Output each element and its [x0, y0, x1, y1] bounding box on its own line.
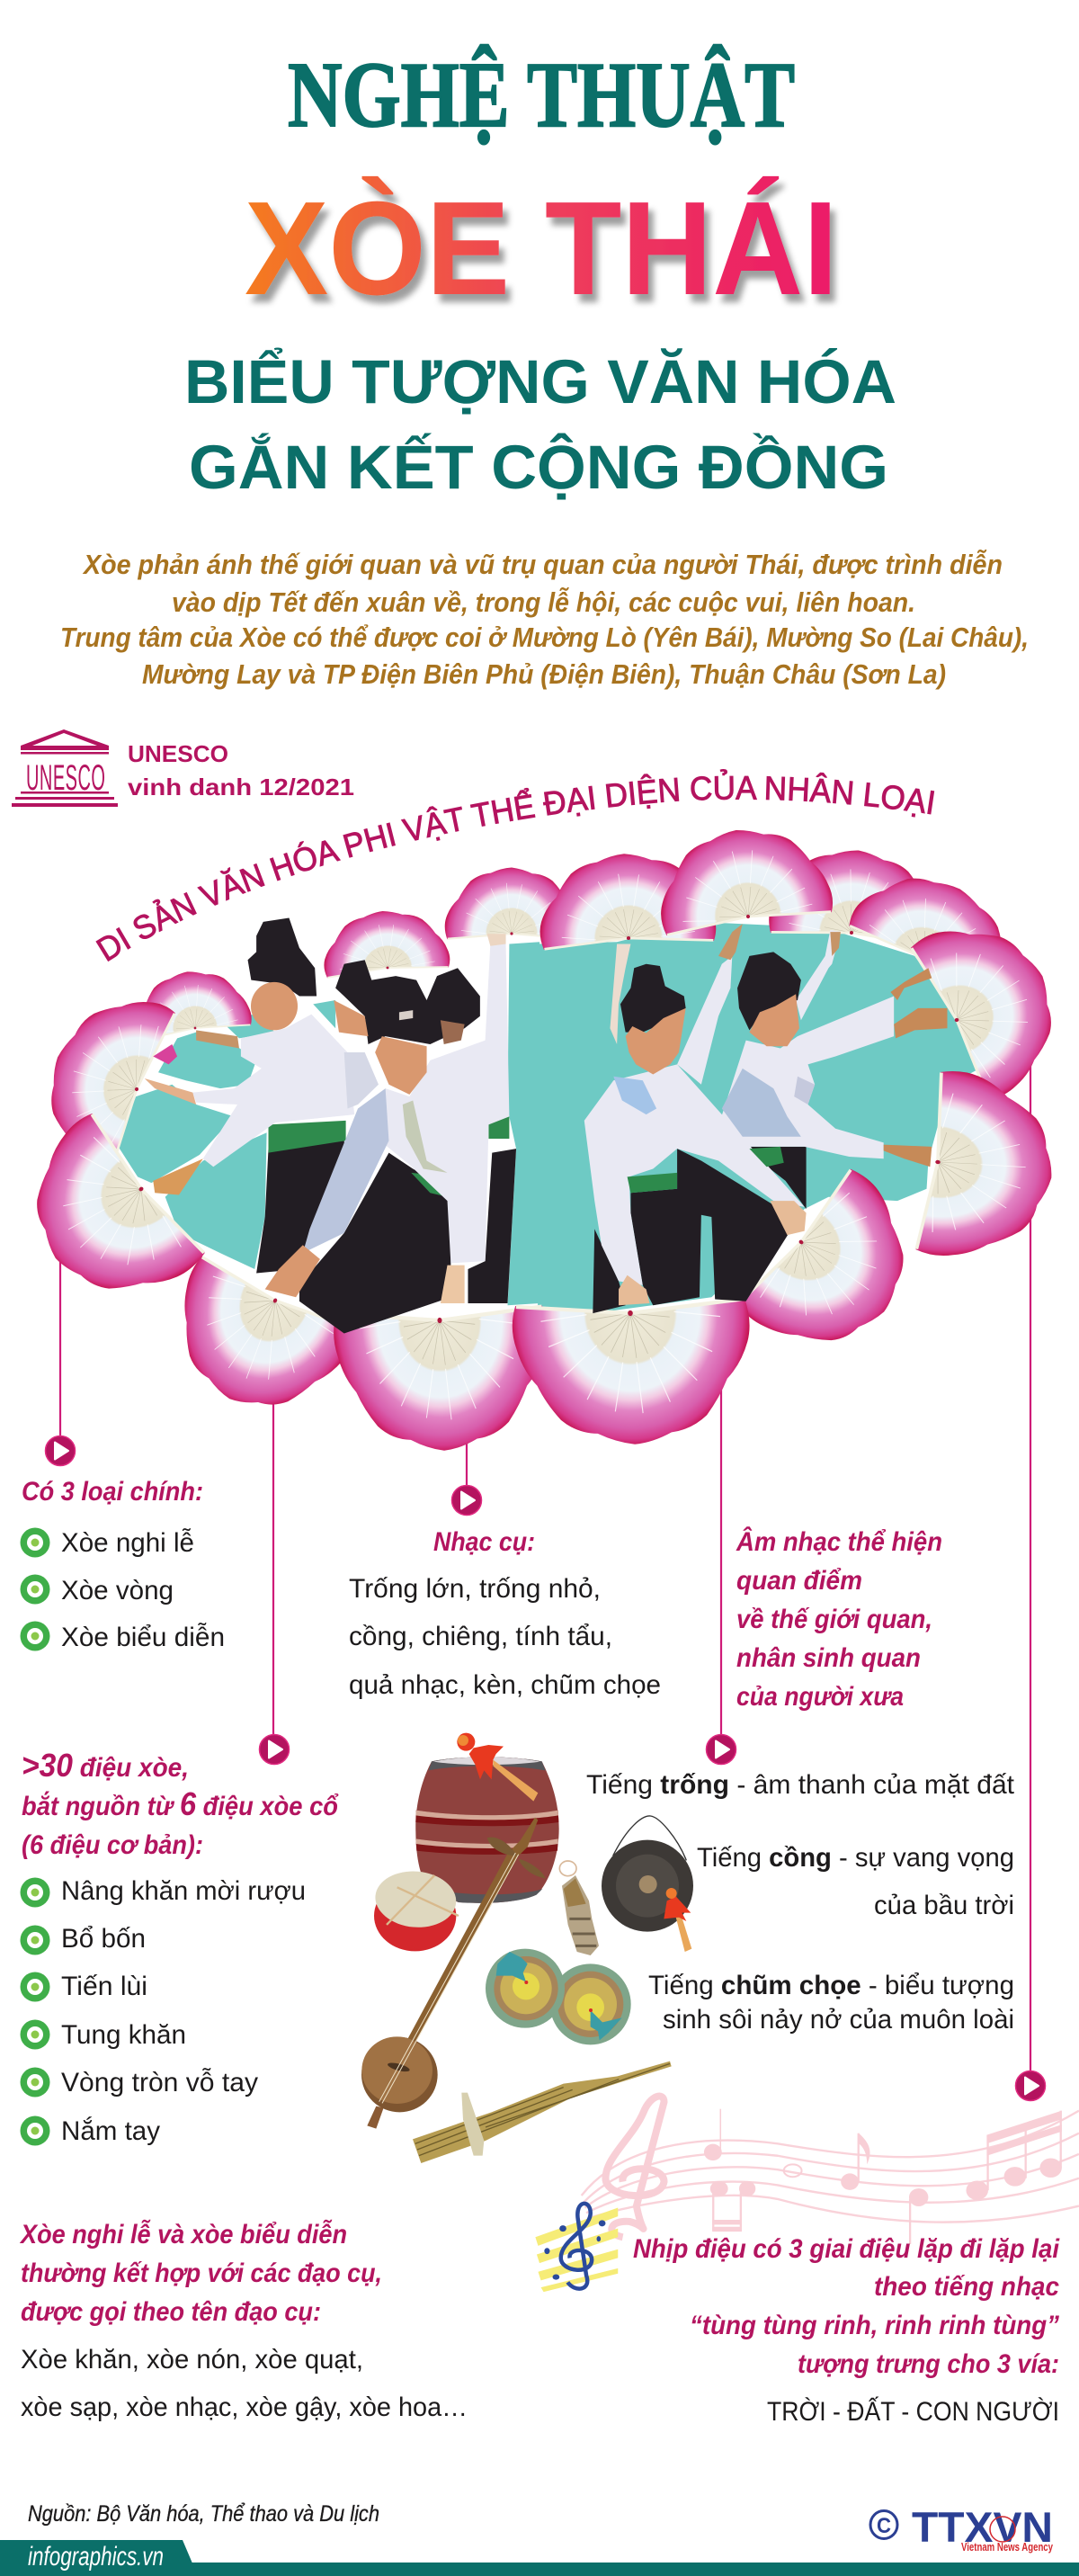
text block: props: thường kết hợp với các đạo cụ,: [21, 2258, 382, 2288]
text block: music worldview: nhân sinh quan: [736, 1643, 921, 1673]
list: three types of Xòe: Xòe biểu diễn: [61, 1623, 225, 1652]
text block: dance count: >30 điệu xòe,: [22, 1747, 189, 1784]
list: three types of Xòe: Xòe nghi lễ: [61, 1528, 194, 1558]
text block: rhythm: [633, 2234, 1060, 2427]
illustration: dancers, left group: [145, 917, 516, 1333]
text block: rhythm: “tùng tùng rinh, rinh rinh tùng”: [690, 2311, 1059, 2340]
text block: music worldview: về thế giới quan,: [736, 1605, 932, 1634]
marker: music meaning: [707, 1734, 736, 1765]
text block: props: xòe sạp, xòe nhạc, xòe gậy, xòe hoa…: [21, 2393, 468, 2422]
text: sounds of instruments: của bầu trời: [874, 1891, 1014, 1920]
icon: cymbals: [486, 1949, 631, 2044]
illustration: ring of fans: [0, 818, 1079, 1454]
list: three types of Xòe: [20, 1527, 225, 1652]
text: sounds of instruments: sinh sôi nảy nở của muôn loài: [663, 2005, 1014, 2035]
intro paragraph: vào dịp Tết đến xuân về, trong lễ hội, các cuộc vui, liên hoan.: [172, 586, 915, 618]
illustration: instruments: [361, 1733, 693, 2163]
text block: music worldview: của người xưa: [736, 1682, 904, 1712]
text block: rhythm: theo tiếng nhạc: [874, 2272, 1059, 2302]
title: Xòe Thái: XÒE THÁI: [245, 174, 838, 323]
marker: rhythm: [1016, 2071, 1045, 2101]
text block: props: được gọi theo tên đạo cụ:: [21, 2297, 321, 2327]
icon: UNESCO temple logo: [12, 729, 118, 807]
text block: instruments: cồng, chiêng, tính tẩu,: [349, 1622, 612, 1651]
text: sounds of instruments: Tiếng chũm chọe - biểu tượng: [648, 1971, 1014, 2000]
subtitle line 2: GẮN KẾT CỘNG ĐỒNG: [189, 433, 888, 502]
text block: props: Xòe khăn, xòe nón, xòe quạt,: [21, 2345, 363, 2375]
text block: props: [19, 2219, 468, 2422]
list: six basic dances: Tung khăn: [61, 2020, 186, 2050]
footer bar: [0, 2540, 1079, 2576]
text block: instruments: Nhạc cụ:: [433, 1527, 535, 1557]
logo: TTXVN: C: [877, 2514, 891, 2538]
list: six basic dances: Vòng tròn vỗ tay: [61, 2068, 258, 2097]
text block: music worldview: quan điểm: [736, 1566, 862, 1596]
icon: UNESCO temple logo: UNESCO: [26, 756, 105, 798]
text block: instruments: [349, 1527, 661, 1700]
curved heading: DI SẢN VĂN HÓA PHI VẬT THỂ ĐẠI DIỆN CỦA NHÂN LOẠI: [95, 769, 935, 962]
list: three types of Xòe: Xòe vòng: [61, 1576, 174, 1606]
text block: instruments: quả nhạc, kèn, chũm chọe: [349, 1670, 661, 1700]
text: sounds of instruments: Tiếng trống - âm thanh của mặt đất: [586, 1770, 1015, 1800]
illustration: pale music staff: [582, 2097, 1079, 2244]
text: sounds of instruments: Tiếng cồng - sự vang vọng: [697, 1843, 1014, 1873]
marker: instruments: [451, 1486, 482, 1515]
connector lines: [60, 1052, 1030, 2073]
list: six basic dances: Nắm tay: [61, 2116, 160, 2146]
text block: music worldview: [736, 1526, 942, 1712]
text: UNESCO recognition: [128, 740, 354, 801]
marker: types: [45, 1436, 76, 1466]
text: UNESCO recognition: vinh danh 12/2021: [128, 774, 354, 801]
title: Nghệ thuật: NGHỆ THUẬT: [288, 43, 795, 147]
icon: blue treble clef with yellow stripes: [535, 2204, 618, 2292]
list: six basic dances: Bổ bốn: [61, 1924, 146, 1954]
heading: main types: Có 3 loại chính:: [22, 1477, 203, 1507]
intro paragraph: [60, 549, 1029, 690]
list: six basic dances: Nâng khăn mời rượu: [61, 1876, 306, 1906]
intro paragraph: Mường Lay và TP Điện Biên Phủ (Điện Biên), Thuận Châu (Sơn La): [142, 658, 946, 690]
illustration: teal backdrop: [117, 922, 980, 1318]
icon: big drum: [415, 1757, 559, 1903]
source: Nguồn: Bộ Văn hóa, Thể thao và Du lịch: [28, 2501, 379, 2527]
icon: khen pipes: [413, 2062, 672, 2163]
icon: shaker: [559, 1861, 599, 1955]
footer bar: infographics.vn: [28, 2542, 164, 2572]
text block: music worldview: Âm nhạc thể hiện: [736, 1526, 942, 1557]
text block: instruments: Trống lớn, trống nhỏ,: [349, 1574, 601, 1604]
text: sounds of instruments: [586, 1770, 1015, 2035]
marker: dance count: [259, 1734, 290, 1765]
icon: small drum: [373, 1868, 459, 1951]
icon: gong: [602, 1816, 693, 1952]
subtitle line 1: BIỂU TƯỢNG VĂN HÓA: [184, 347, 896, 416]
icon: drum mallet: [457, 1733, 538, 1802]
list: six basic dances: Tiến lùi: [61, 1972, 147, 2001]
logo: TTXVN: TTXVN: [912, 2503, 1053, 2551]
illustration: dancers, right group: [584, 924, 947, 1313]
intro paragraph: Xòe phản ánh thế giới quan và vũ trụ quan của người Thái, được trình diễn: [82, 549, 1003, 580]
text block: dance count: bắt nguồn từ 6 điệu xòe cổ: [22, 1785, 339, 1822]
text: UNESCO recognition: UNESCO: [128, 740, 228, 767]
icon: tinh lute: [361, 1818, 546, 2129]
list: six basic dances: [20, 1876, 306, 2146]
text block: dance count: (6 điệu cơ bản):: [22, 1830, 203, 1860]
text block: props: Xòe nghi lễ và xòe biểu diễn: [19, 2219, 347, 2250]
text block: dance count: [22, 1747, 339, 1860]
